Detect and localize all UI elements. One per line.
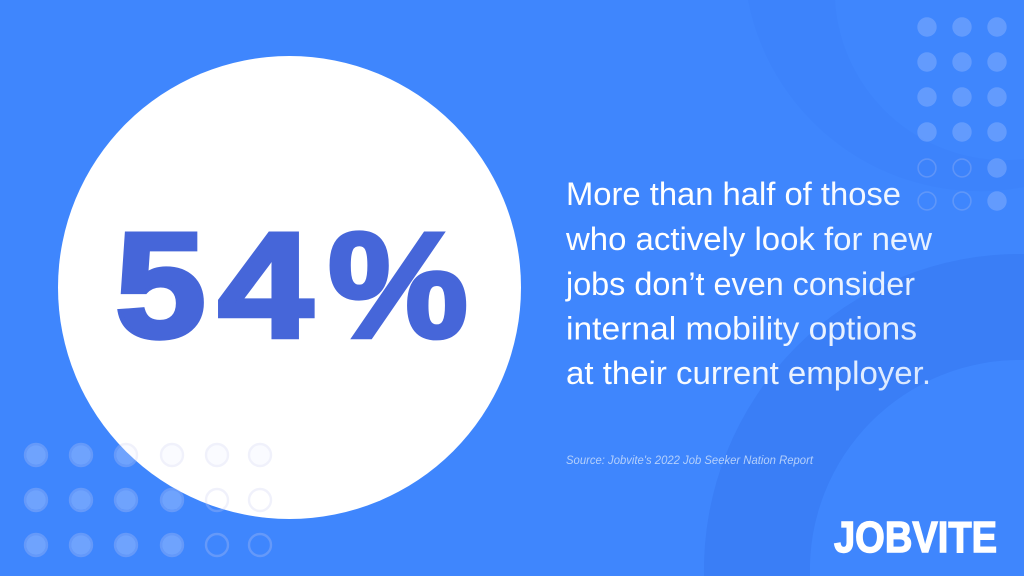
source note: Source: Jobvite's 2022 Job Seeker Nation Report xyxy=(566,455,814,467)
main statement text: at their current employer. xyxy=(566,355,931,391)
dot fills xyxy=(26,445,270,555)
white circle xyxy=(58,56,521,519)
big statistic: 54%: 5 xyxy=(115,201,206,369)
main statement text xyxy=(565,176,933,391)
big statistic: 54%: % xyxy=(328,201,468,369)
dot grid: top right xyxy=(917,17,1007,211)
dot grid: bottom left xyxy=(25,444,271,556)
ring dots xyxy=(918,159,971,210)
main statement text: who actively look for new xyxy=(565,221,933,257)
main statement text: More than half of those xyxy=(566,176,901,212)
dot rings xyxy=(25,444,271,556)
main statement text: internal mobility options xyxy=(566,310,917,346)
background arcs: bottom right xyxy=(704,254,1024,576)
big statistic: 54% xyxy=(115,201,468,369)
filled dots xyxy=(917,17,1007,211)
background arcs: top right xyxy=(748,0,1024,191)
logo: Jobvite: JOBVITE xyxy=(834,513,997,562)
big statistic: 54%: 4 xyxy=(218,201,313,369)
main statement text: jobs don’t even consider xyxy=(565,266,915,302)
